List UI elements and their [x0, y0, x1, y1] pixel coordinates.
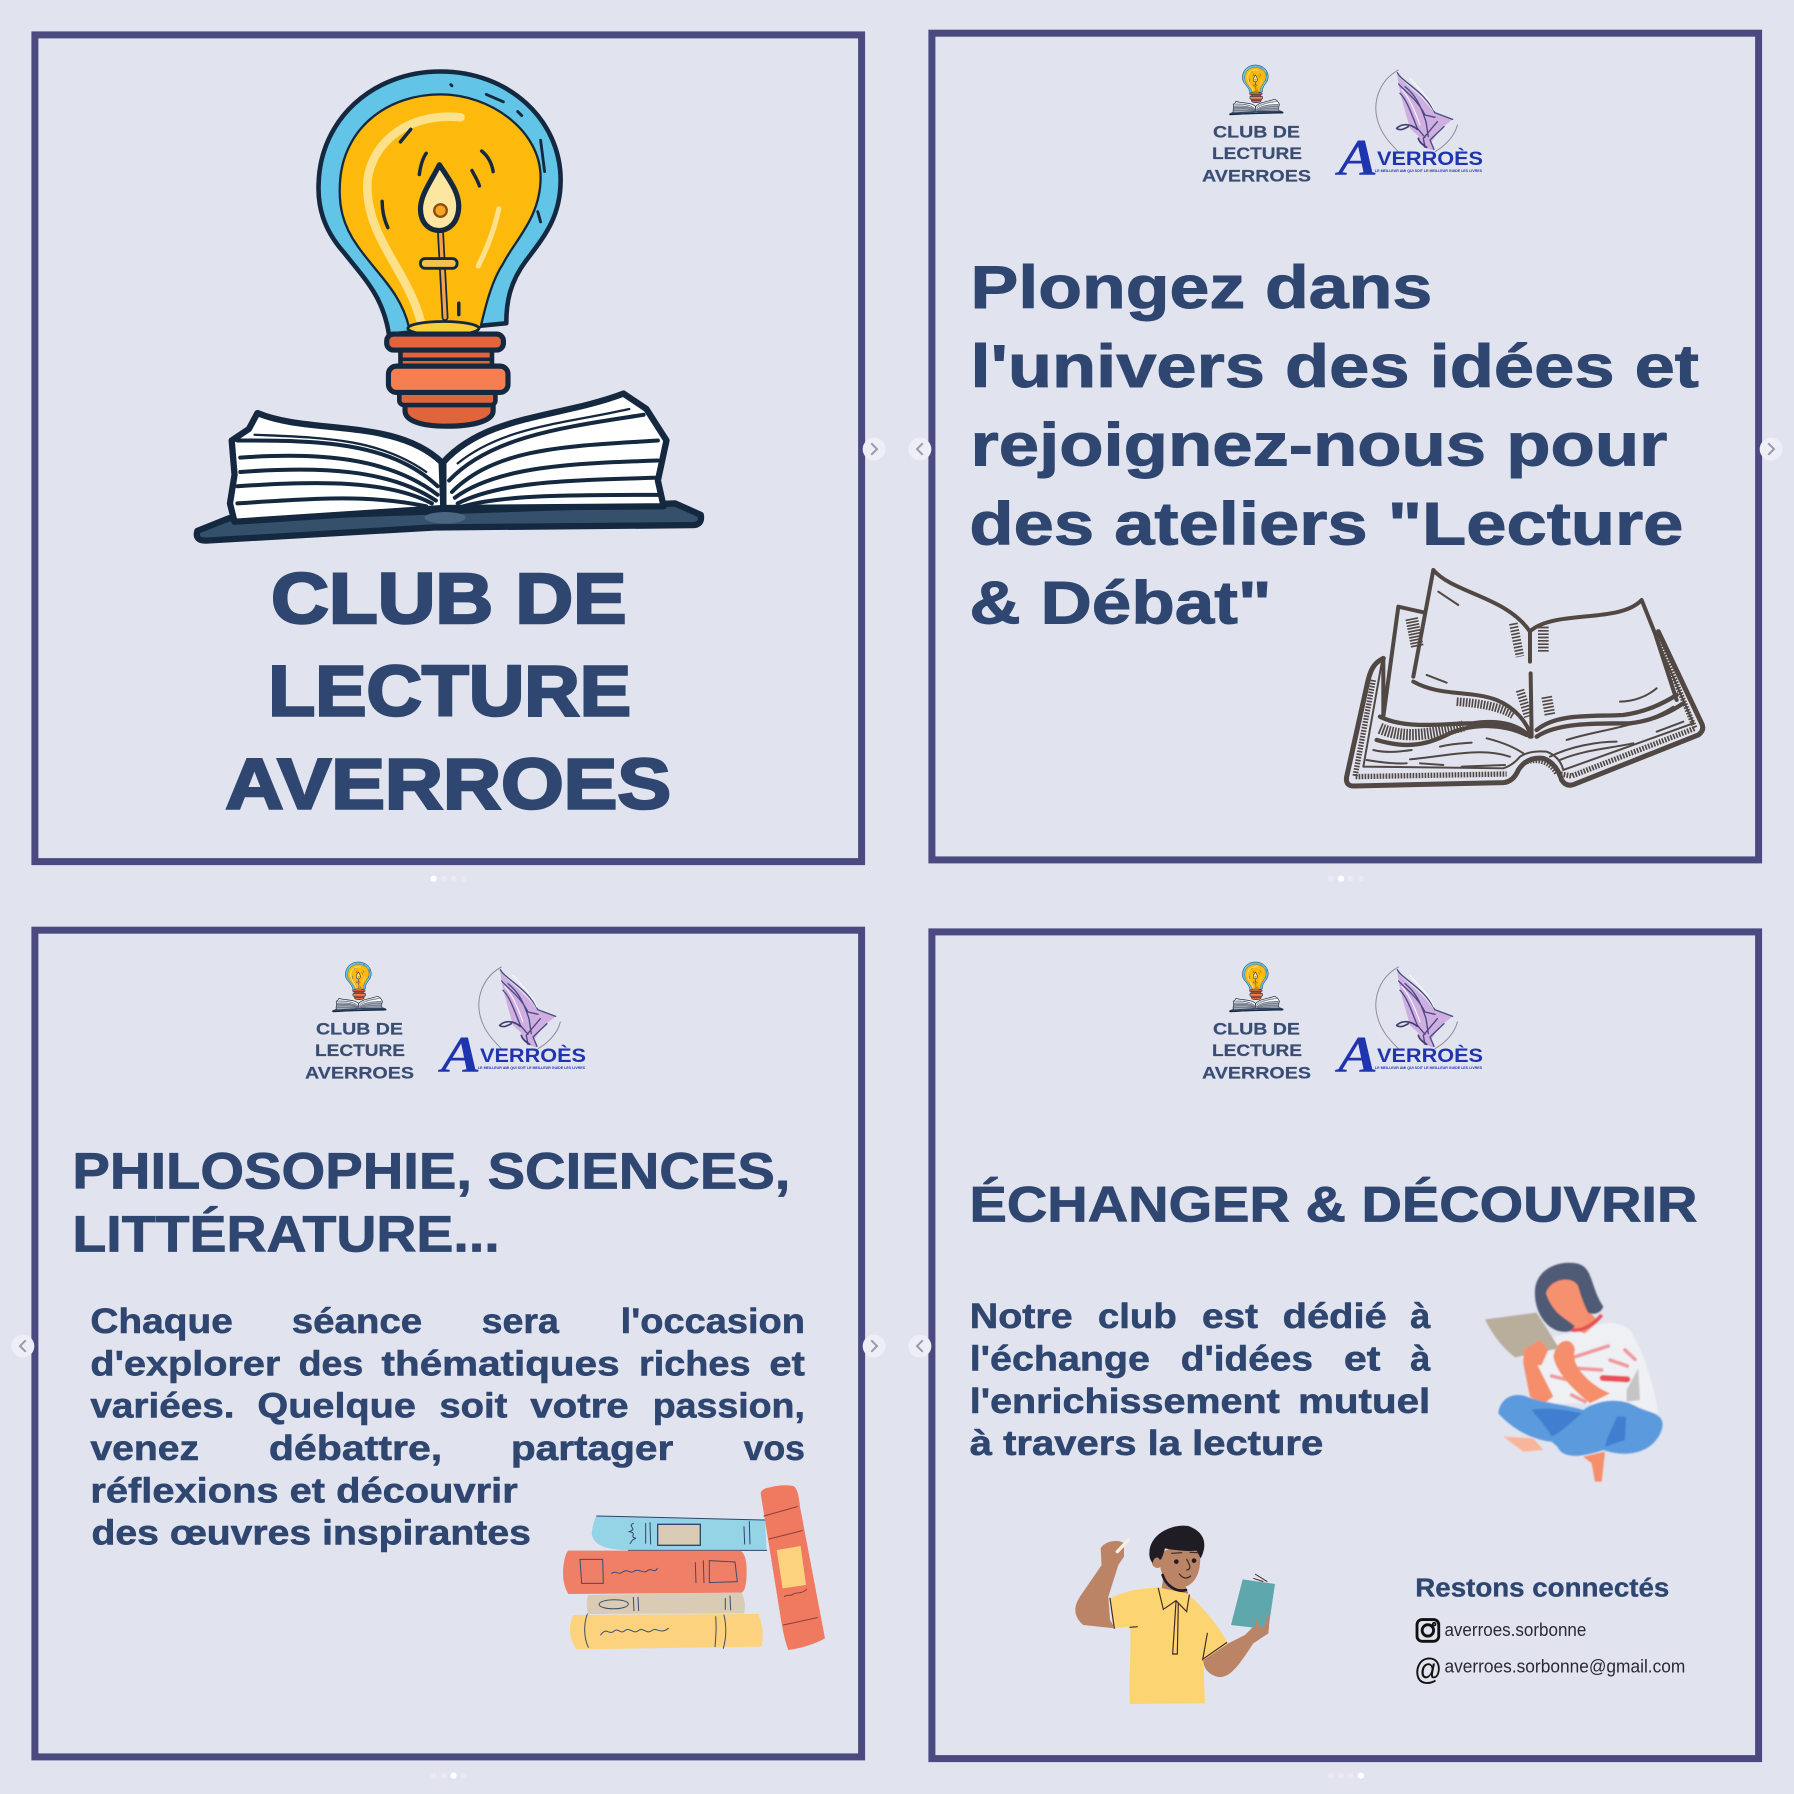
illustration: reader sitting [1485, 1263, 1663, 1482]
heading: philosophie, sciences, littérature: PHILOSOPHIE, SCIENCES, [72, 1143, 790, 1200]
body text: chaque séance: l'occasion [621, 1301, 805, 1341]
next arrow [863, 438, 886, 461]
logo: club de lecture: AVERROES [1202, 1064, 1311, 1083]
body text: chaque séance: vos [744, 1428, 805, 1468]
body text: chaque séance: débattre, [269, 1428, 442, 1468]
contact block: restons connectés: averroes.sorbonne [1444, 1619, 1586, 1640]
next arrow [1760, 438, 1783, 461]
body text: notre club: est [1202, 1296, 1258, 1336]
logo: averroes eagle: VERROÈS [1377, 147, 1483, 170]
logo: club de lecture: CLUB DE [316, 1019, 403, 1038]
heading: plongez dans l'univers [969, 254, 1699, 636]
heading: plongez dans l'univers: l'univers des idées et [971, 333, 1699, 400]
heading: philosophie, sciences, littérature: LITTÉRATURE... [72, 1206, 500, 1263]
body text: notre club: à travers la lecture [970, 1423, 1323, 1463]
body text: chaque séance: des œuvres inspirantes [92, 1513, 531, 1553]
body text: chaque séance: réflexions et découvrir [90, 1470, 518, 1510]
contact block: restons connectés: averroes.sorbonne@gmail.com [1444, 1656, 1685, 1677]
illustration: teacher with book [1075, 1526, 1275, 1704]
logo: club de lecture: LECTURE [1212, 144, 1302, 163]
body text: chaque séance: Quelque [257, 1386, 416, 1426]
panel border [35, 35, 862, 862]
body text: notre club: à [1410, 1339, 1431, 1379]
logo: club de lecture: LECTURE [315, 1041, 405, 1060]
heading: plongez dans l'univers: Plongez dans [971, 254, 1432, 321]
body text: chaque séance: soit [439, 1386, 508, 1426]
pagination dots [431, 1773, 467, 1779]
body text: chaque séance: riches [639, 1343, 751, 1383]
panel border [932, 932, 1759, 1759]
panel border [932, 33, 1759, 860]
logo: averroes eagle: A [1335, 1027, 1378, 1084]
body text: notre club: Notre [970, 1296, 1073, 1336]
heading: plongez dans l'univers: & Débat" [969, 569, 1272, 636]
logo: averroes eagle [1335, 967, 1483, 1084]
contact block: restons connectés [1414, 1575, 1685, 1687]
logo: club de lecture [305, 962, 414, 1083]
logo: averroes eagle: LE MEILLEUR AMI QUI SOIT LE MEILLEUR GUIDE LES LIVRES [1375, 169, 1483, 173]
panel border [35, 930, 862, 1757]
logo: averroes eagle: VERROÈS [1377, 1044, 1483, 1067]
logo: averroes eagle [438, 967, 586, 1084]
heading: échanger et découvrir: ÉCHANGER & DÉCOUVRIR [970, 1175, 1697, 1232]
logo: club de lecture [1202, 65, 1311, 186]
body text: chaque séance: des [299, 1343, 363, 1383]
panel: club title [35, 35, 886, 882]
panel: échanger et découvrir [908, 932, 1759, 1779]
previous arrow [11, 1335, 34, 1358]
body text: notre club: et [1344, 1339, 1381, 1379]
pagination dots [1328, 876, 1364, 882]
logo: club de lecture [1202, 962, 1311, 1083]
logo: averroes eagle: A [438, 1027, 481, 1084]
body text: notre club [970, 1296, 1431, 1463]
logo: averroes eagle [1335, 70, 1483, 187]
logo: club de lecture: CLUB DE [1213, 1019, 1300, 1038]
icon: stack of books [563, 1485, 825, 1650]
pagination dots [1328, 1773, 1364, 1779]
body text: chaque séance: votre [530, 1386, 629, 1426]
panel: plongez dans [908, 33, 1783, 882]
logo: club de lecture: AVERROES [305, 1064, 414, 1083]
body text: notre club: dédié [1283, 1296, 1387, 1336]
contact block: restons connectés: Restons connectés [1415, 1575, 1669, 1603]
body text: chaque séance: Chaque [90, 1301, 233, 1341]
body text: chaque séance: et [769, 1343, 805, 1383]
body text: notre club: club [1098, 1296, 1177, 1336]
body text: chaque séance: variées. [90, 1386, 235, 1426]
logo: club de lecture: LECTURE [1212, 1041, 1302, 1060]
body text: notre club: mutuel [1298, 1381, 1430, 1421]
body text: notre club: d'idées [1181, 1339, 1313, 1379]
title: club de lecture averroes: LECTURE [268, 652, 631, 732]
icon: sketched open book [1346, 570, 1703, 786]
body text: chaque séance: thématiques [382, 1343, 620, 1383]
icon: instagram [1417, 1620, 1439, 1641]
body text: notre club: l'enrichissement [970, 1381, 1280, 1421]
logo: averroes eagle: VERROÈS [480, 1044, 586, 1067]
body text: chaque séance: séance [292, 1301, 422, 1341]
panel: philosophie [11, 930, 886, 1779]
logo: averroes eagle: LE MEILLEUR AMI QUI SOIT LE MEILLEUR GUIDE LES LIVRES [1375, 1066, 1483, 1070]
logo: averroes eagle: LE MEILLEUR AMI QUI SOIT LE MEILLEUR GUIDE LES LIVRES [478, 1066, 586, 1070]
heading: plongez dans l'univers: rejoignez-nous pour [971, 412, 1667, 479]
body text: chaque séance: d'explorer [90, 1343, 281, 1383]
heading: philosophie, sciences, littérature [72, 1143, 790, 1263]
pagination dots [430, 876, 467, 882]
icon: light bulb above open book [197, 72, 701, 541]
previous arrow [908, 1335, 931, 1358]
title: club de lecture averroes: AVERROES [225, 744, 671, 824]
body text: chaque séance [90, 1301, 805, 1553]
title: club de lecture averroes: CLUB DE [271, 559, 626, 639]
body text: chaque séance: partager [511, 1428, 674, 1468]
next arrow [863, 1335, 886, 1358]
body text: notre club: à [1410, 1296, 1431, 1336]
logo: club de lecture: AVERROES [1202, 167, 1311, 186]
body text: chaque séance: venez [90, 1428, 199, 1468]
body text: chaque séance: sera [482, 1301, 559, 1341]
contact block: restons connectés: @ [1414, 1652, 1442, 1687]
logo: club de lecture: CLUB DE [1213, 122, 1300, 141]
body text: notre club: l'échange [970, 1339, 1150, 1379]
body text: chaque séance: passion, [653, 1386, 805, 1426]
previous arrow [908, 438, 931, 461]
title: club de lecture averroes [225, 559, 671, 824]
heading: plongez dans l'univers: des ateliers "Lecture [969, 491, 1683, 557]
logo: averroes eagle: A [1335, 130, 1378, 187]
